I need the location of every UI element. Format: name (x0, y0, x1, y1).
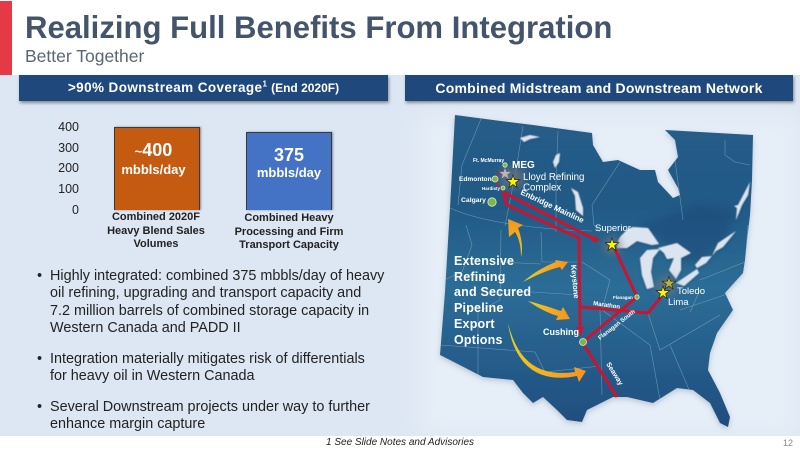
lake: Huron (658, 243, 691, 279)
bullet 2: Integration materially mitigates risk of differentials (50, 351, 365, 367)
state and province borders (440, 119, 750, 400)
Edmonton ring (497, 170, 503, 190)
bar: heavy blend sales: mbbls/day (121, 162, 186, 177)
category: capacity: Transport Capacity (239, 239, 339, 251)
arrow: north (508, 219, 523, 257)
map labels: Flanagan South (598, 309, 637, 342)
bar: heavy blend sales: ~400 (135, 140, 172, 160)
pipeline arrowheads (576, 235, 600, 336)
y axis labels: 300 (58, 141, 79, 155)
pipeline: Marathon (581, 297, 661, 313)
bullet 1: Western Canada and PADD II (50, 320, 241, 336)
pipeline: Enbridge Mainline (503, 192, 594, 328)
category: heavy blend: Volumes (133, 238, 179, 250)
accent bar (0, 1, 12, 75)
lake: Michigan (640, 249, 660, 289)
header: network: Combined Midstream and Downstream Network (435, 80, 763, 96)
category: capacity (235, 212, 343, 251)
lake: Ontario and St Lawrence (695, 231, 736, 268)
map labels: Extensive (454, 254, 514, 268)
bar: processing and transport: 375 (274, 145, 304, 165)
great lakes (520, 135, 750, 289)
lake: Superior (617, 227, 659, 248)
bullet 1: • (37, 268, 42, 284)
bullet 2: • (37, 351, 42, 367)
refinery stars (499, 168, 676, 298)
lake: Erie (676, 269, 699, 286)
bullet 3: • (37, 399, 42, 415)
bullet 3 (37, 399, 370, 432)
category: heavy blend: Combined 2020F (112, 211, 200, 223)
category: capacity: Processing and Firm (235, 226, 343, 238)
land mass (440, 115, 753, 427)
category: heavy blend: Heavy Blend Sales (107, 224, 205, 236)
bullet 2: for heavy oil in Western Canada (50, 368, 255, 384)
bar: processing and transport (246, 132, 332, 210)
header: downstream coverage: >90% Downstream Coverage1 (End 2020F) (68, 80, 339, 95)
map labels: Cushing (543, 327, 579, 337)
map labels: Toledo (677, 286, 705, 297)
bullet 1: oil refining, upgrading and transport capacity and (50, 285, 361, 301)
header: network (405, 75, 793, 101)
arrow: east upper (523, 260, 568, 282)
pipeline: Flanagan South (583, 297, 637, 342)
title: Realizing Full Benefits From Integration (25, 10, 612, 45)
pipeline: Superior to Flanagan (614, 247, 637, 297)
map labels: Pipeline (454, 301, 504, 315)
bullet 1: 7.2 million barrels of combined storage capacity in (50, 303, 369, 319)
map labels: Keystone (569, 264, 581, 299)
map labels: Options (454, 333, 503, 347)
category: heavy blend (107, 211, 205, 250)
northern lakes (520, 135, 583, 216)
bullet 1 (37, 268, 384, 336)
map labels: and Secured (454, 285, 531, 299)
map labels: Refining (454, 270, 506, 284)
map labels: Superior (595, 223, 631, 234)
footnote: 1 See Slide Notes and Advisories (326, 437, 474, 448)
y axis labels: 100 (58, 182, 79, 196)
bullet list (37, 268, 384, 432)
map labels: Seaway (604, 361, 624, 387)
bullet 3: enhance margin capture (50, 416, 205, 432)
bullet 3: Several Downstream projects under way to further (50, 399, 370, 415)
map labels: Flanagan (613, 295, 633, 300)
bar: processing and transport: mbbls/day (257, 165, 321, 180)
map labels: Enbridge Mainline (519, 188, 586, 225)
map labels: Lima (668, 297, 689, 308)
map labels: Edmonton (459, 176, 492, 183)
map labels: Lloyd Refining (523, 172, 584, 183)
pipelines (503, 192, 661, 397)
subtitle: Better Together (25, 46, 144, 66)
bar: heavy blend sales (114, 127, 200, 210)
bar chart (58, 120, 343, 251)
arrow: south-east curved (508, 323, 586, 382)
dark water shading (440, 119, 750, 400)
y axis labels: 200 (58, 161, 79, 175)
city markers (488, 163, 639, 346)
river: St Lawrence estuary (734, 182, 750, 220)
map labels: Complex (523, 182, 561, 194)
category: capacity: Combined Heavy (244, 212, 334, 224)
y axis labels (58, 120, 79, 217)
map labels: Marathon (593, 301, 621, 311)
bullet 2 (37, 351, 365, 384)
map labels: Ft. McMurray (473, 158, 504, 164)
network map (432, 102, 788, 428)
refinery halos (500, 168, 676, 296)
map labels: Export (454, 317, 495, 331)
page number: 12 (783, 438, 793, 448)
background glow (420, 115, 800, 435)
pipeline: Seaway (584, 345, 617, 397)
y axis labels: 0 (72, 203, 79, 217)
map labels (454, 158, 705, 387)
map labels: MEG (512, 160, 535, 171)
header: downstream coverage (19, 75, 388, 101)
orange arrows (508, 219, 586, 382)
arrow: east middle (528, 301, 570, 320)
bullet 1: Highly integrated: combined 375 mbbls/day of heavy (50, 268, 384, 284)
y axis labels: 400 (58, 120, 79, 134)
map labels: Hardisty (482, 186, 501, 191)
map labels: Calgary (461, 197, 486, 204)
